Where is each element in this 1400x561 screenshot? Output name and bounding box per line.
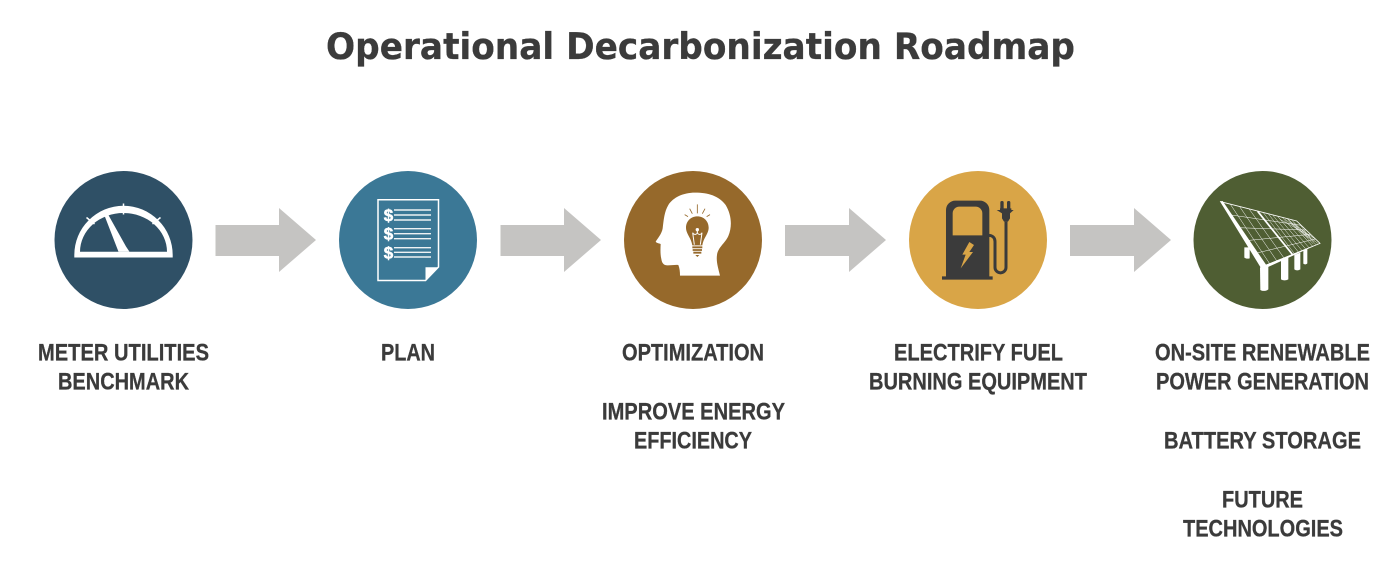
circle: electrify bbox=[909, 171, 1047, 309]
step 1: meter utilities bbox=[38, 171, 209, 396]
icon: document with dollar lines bbox=[378, 200, 438, 280]
circle: optimization bbox=[624, 171, 762, 309]
arrow 3 bbox=[785, 208, 886, 272]
icon: document with dollar lines: $ bbox=[384, 224, 394, 244]
label: meter utilities benchmark: BENCHMARK bbox=[58, 369, 190, 396]
label: plan: PLAN bbox=[381, 340, 435, 367]
label: optimization improve energy efficiency: EFFICIENCY bbox=[634, 428, 752, 455]
label: electrify fuel burning equipment: ELECTRIFY FUEL bbox=[894, 340, 1063, 367]
label: renewable power, battery storage, future technologies: FUTURE bbox=[1222, 486, 1303, 513]
title: Operational Decarbonization Roadmap bbox=[326, 25, 1075, 68]
icon: solar panel array bbox=[1220, 201, 1320, 291]
label: renewable power, battery storage, future technologies: TECHNOLOGIES bbox=[1183, 515, 1343, 542]
circle: plan bbox=[339, 171, 477, 309]
arrow 2 bbox=[500, 208, 601, 272]
step 5: renewables bbox=[1155, 171, 1370, 542]
icon: head with light bulb bbox=[656, 193, 731, 276]
label: meter utilities benchmark bbox=[38, 340, 209, 396]
step 4: electrify bbox=[869, 171, 1087, 396]
icon: document with dollar lines: $ bbox=[384, 244, 394, 262]
step 2: plan bbox=[339, 171, 477, 367]
circle: meter bbox=[54, 171, 192, 309]
arrow 1 bbox=[216, 208, 316, 272]
label: electrify fuel burning equipment bbox=[869, 340, 1087, 396]
label: optimization improve energy efficiency bbox=[602, 340, 785, 455]
circle: renewables bbox=[1194, 171, 1332, 309]
step 3: optimization bbox=[602, 171, 785, 455]
label: optimization improve energy efficiency: OPTIMIZATION bbox=[622, 340, 764, 367]
label: renewable power, battery storage, future technologies: BATTERY STORAGE bbox=[1164, 428, 1361, 455]
label: renewable power, battery storage, future technologies bbox=[1155, 340, 1370, 542]
arrow 4 bbox=[1070, 208, 1171, 272]
icon: document with dollar lines: $ bbox=[384, 206, 394, 225]
label: optimization improve energy efficiency: IMPROVE ENERGY bbox=[602, 399, 785, 426]
icon: gauge bbox=[74, 204, 173, 258]
label: meter utilities benchmark: METER UTILITIES bbox=[38, 340, 209, 367]
icon: electric charging pump bbox=[942, 201, 1014, 280]
label: electrify fuel burning equipment: BURNING EQUIPMENT bbox=[869, 369, 1087, 396]
